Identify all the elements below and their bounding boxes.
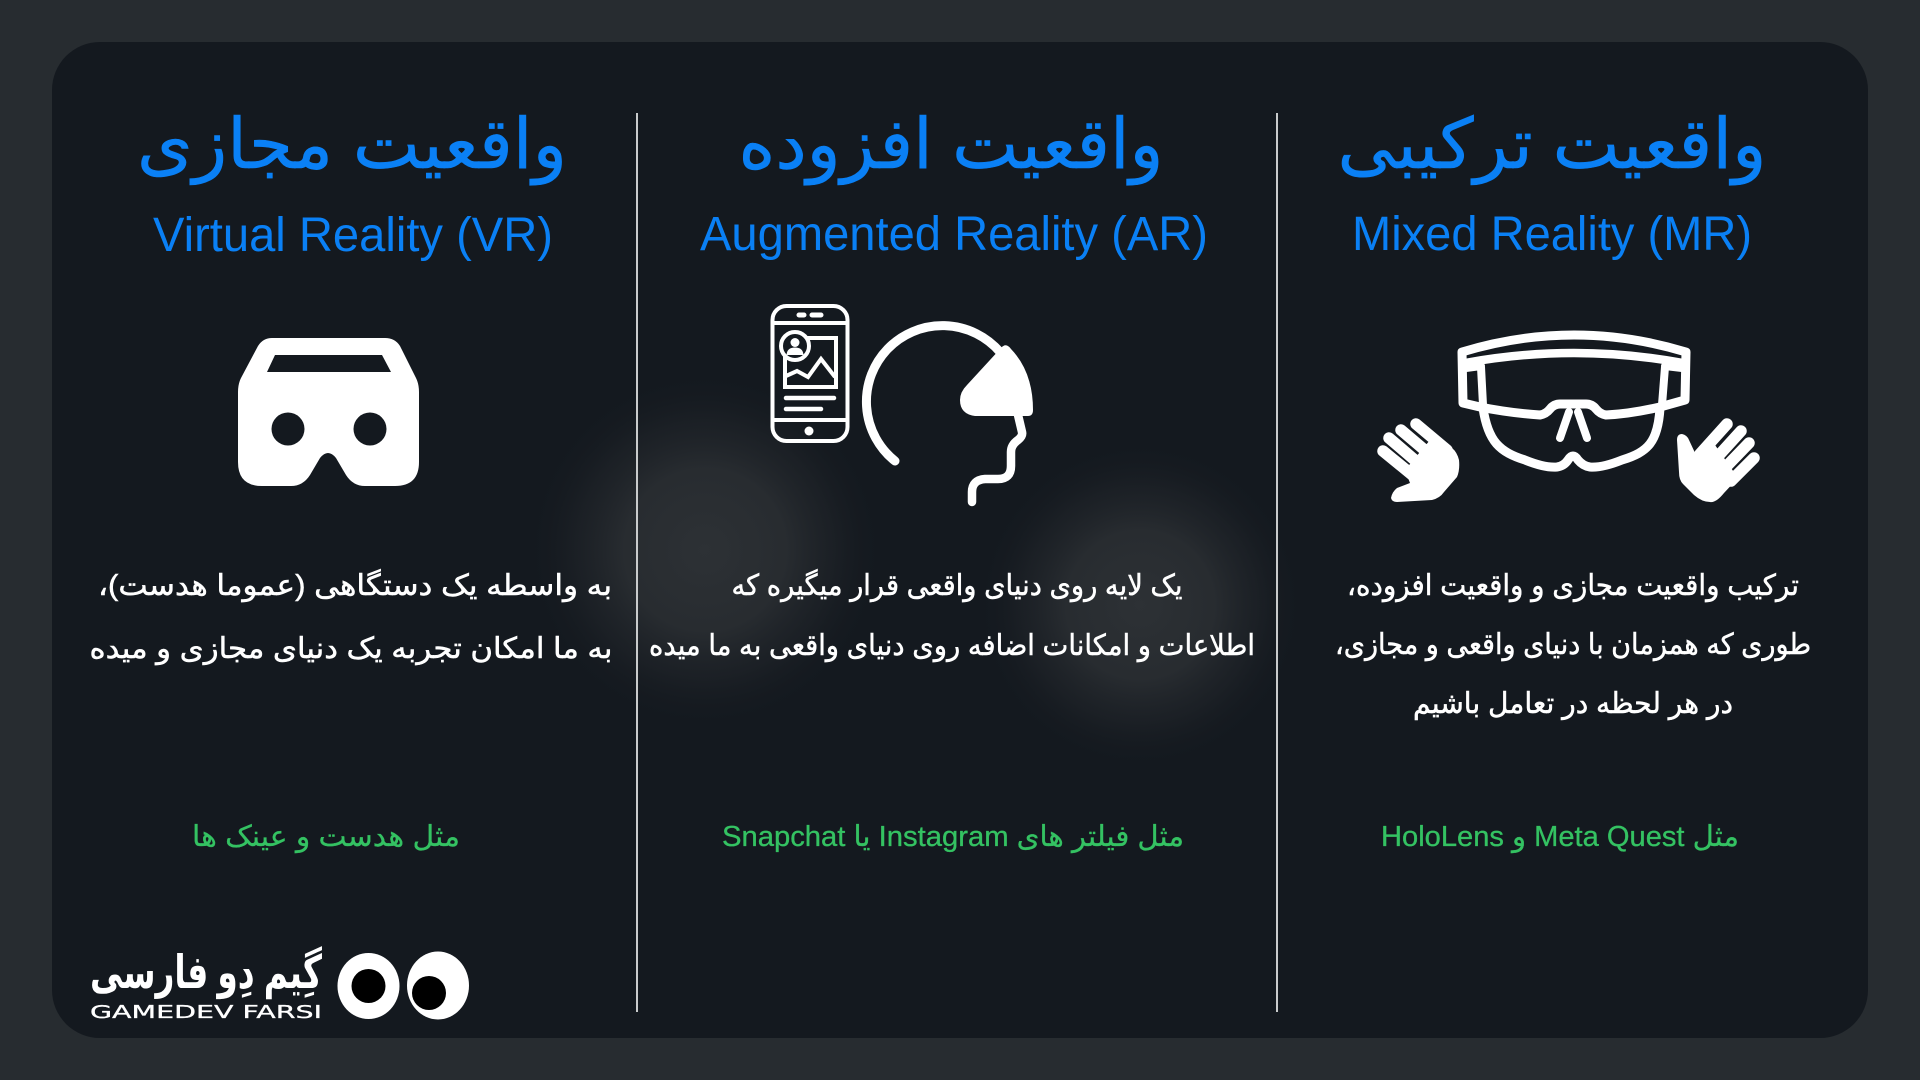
example: AR: مثل فیلتر های Instagram یا Snapchat bbox=[722, 821, 1184, 853]
body text: AR: یک لایه روی دنیای واقعی قرار میگیره که bbox=[732, 569, 1182, 602]
heading: MR Persian: واقعیت ترکیبی bbox=[1338, 105, 1766, 186]
heading: MR English: Mixed Reality (MR) bbox=[1352, 208, 1752, 261]
body text: MR: در هر لحظه در تعامل باشیم bbox=[1413, 688, 1733, 721]
icon: left hand bbox=[1383, 424, 1459, 502]
heading: AR Persian: واقعیت افزوده bbox=[738, 105, 1164, 186]
logo: gamedev farsi bbox=[90, 946, 469, 1023]
body text: AR: اطلاعات و امکانات اضافه روی دنیای واقعی به ما میده bbox=[649, 630, 1255, 662]
body text: VR: به واسطه یک دستگاهی (عموما هدست)، bbox=[98, 569, 612, 602]
icon: phone bbox=[772, 306, 848, 441]
body text: MR: ترکیب واقعیت مجازی و واقعیت افزوده، bbox=[1347, 570, 1799, 602]
heading: AR English: Augmented Reality (AR) bbox=[700, 208, 1208, 261]
logo eyes bbox=[338, 952, 469, 1020]
icon: VR headset bbox=[238, 338, 419, 486]
body text: VR bbox=[90, 569, 612, 665]
logo wordmark Persian: گِیم دِو فارسی bbox=[90, 946, 322, 999]
body text: MR bbox=[1335, 570, 1811, 721]
panel: virtual reality bbox=[90, 105, 612, 853]
icon: right hand bbox=[1677, 424, 1754, 502]
body text: AR bbox=[649, 569, 1255, 662]
example: MR: مثل Meta Quest و HoloLens bbox=[1381, 821, 1739, 853]
body text: VR: به ما امکان تجربه یک دنیای مجازی و میده bbox=[90, 633, 612, 665]
panel: mixed reality bbox=[1335, 105, 1811, 853]
panel: augmented reality bbox=[649, 105, 1255, 853]
heading: VR Persian: واقعیت مجازی bbox=[137, 105, 567, 186]
logo wordmark English: GAMEDEV FARSI bbox=[90, 1002, 322, 1023]
example: VR: مثل هدست و عینک ها bbox=[192, 821, 460, 853]
body text: MR: طوری که همزمان با دنیای واقعی و مجازی، bbox=[1335, 629, 1811, 661]
icon: AR head and visor bbox=[866, 326, 1033, 502]
icon: MR visor bbox=[1462, 335, 1686, 467]
heading: VR English: Virtual Reality (VR) bbox=[153, 209, 553, 262]
